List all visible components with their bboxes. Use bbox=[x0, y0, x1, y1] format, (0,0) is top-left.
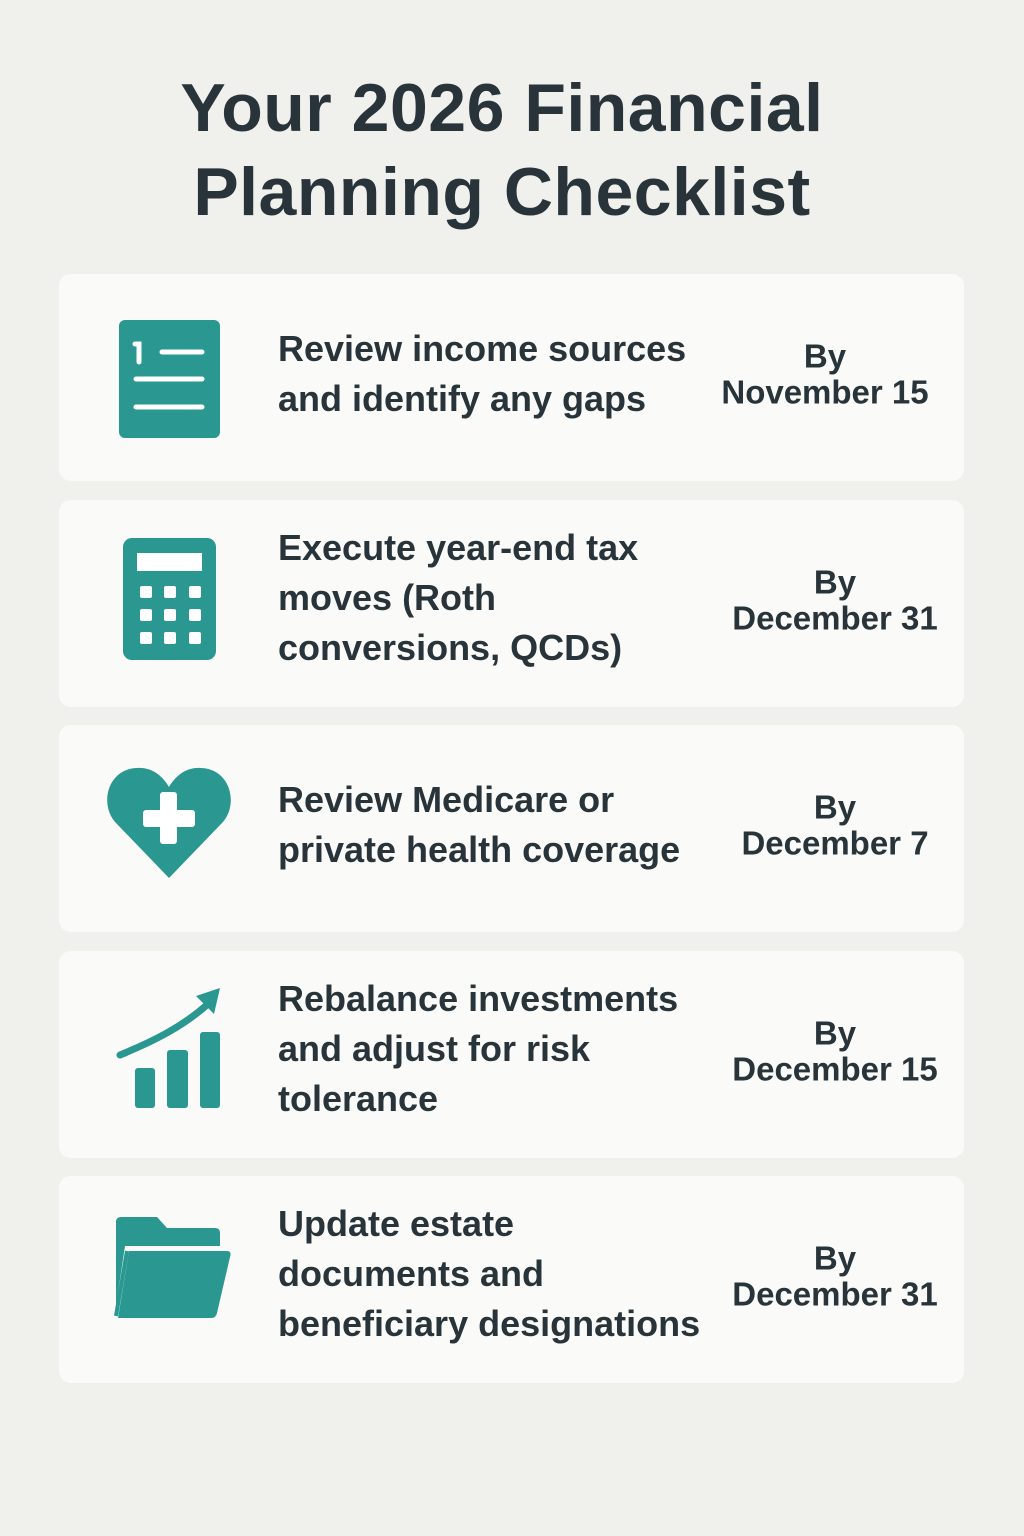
card 1: income bbox=[59, 274, 964, 481]
title: Your 2026 Financial bbox=[180, 70, 824, 146]
task text: Execute year-end tax bbox=[278, 526, 638, 568]
deadline bbox=[741, 788, 929, 861]
deadline: November 15 bbox=[721, 373, 929, 410]
task text: private health coverage bbox=[278, 828, 680, 870]
deadline: By bbox=[804, 337, 846, 374]
title: Planning Checklist bbox=[193, 154, 811, 230]
deadline bbox=[732, 563, 938, 636]
deadline bbox=[732, 1014, 938, 1087]
task text: tolerance bbox=[278, 1078, 438, 1118]
task text: Review income sources bbox=[278, 328, 686, 368]
task text: moves (Roth bbox=[278, 576, 496, 618]
card 3: health bbox=[59, 725, 964, 932]
card 2: tax bbox=[59, 500, 964, 707]
deadline: December 31 bbox=[732, 599, 938, 636]
task text: conversions, QCDs) bbox=[278, 626, 622, 668]
icon: numbered list bbox=[119, 320, 220, 438]
task text: Review Medicare or bbox=[278, 778, 614, 820]
deadline bbox=[721, 337, 929, 410]
deadline: By bbox=[814, 1239, 856, 1276]
card 5: estate bbox=[59, 1176, 964, 1383]
task text bbox=[278, 328, 686, 418]
deadline bbox=[732, 1239, 938, 1312]
card 4: investments bbox=[59, 951, 964, 1158]
task text bbox=[278, 778, 680, 870]
icon: heart with cross bbox=[107, 768, 231, 878]
task text: Update estate bbox=[278, 1202, 514, 1244]
deadline: By bbox=[814, 788, 856, 825]
task text: and adjust for risk bbox=[278, 1028, 590, 1068]
deadline: By bbox=[814, 1014, 856, 1051]
task text: beneficiary designations bbox=[278, 1302, 700, 1344]
deadline: December 15 bbox=[732, 1050, 938, 1087]
task text bbox=[278, 526, 638, 668]
icon: growth chart bbox=[116, 988, 220, 1108]
deadline: December 31 bbox=[732, 1275, 938, 1312]
deadline: By bbox=[814, 563, 856, 600]
task text bbox=[278, 978, 678, 1118]
task text: and identify any gaps bbox=[278, 378, 646, 418]
deadline: December 7 bbox=[741, 824, 929, 861]
task text: documents and bbox=[278, 1252, 544, 1294]
task text bbox=[278, 1202, 700, 1344]
icon: calculator bbox=[123, 538, 216, 660]
task text: Rebalance investments bbox=[278, 978, 678, 1018]
title bbox=[180, 70, 824, 230]
icon: folder bbox=[114, 1217, 231, 1318]
